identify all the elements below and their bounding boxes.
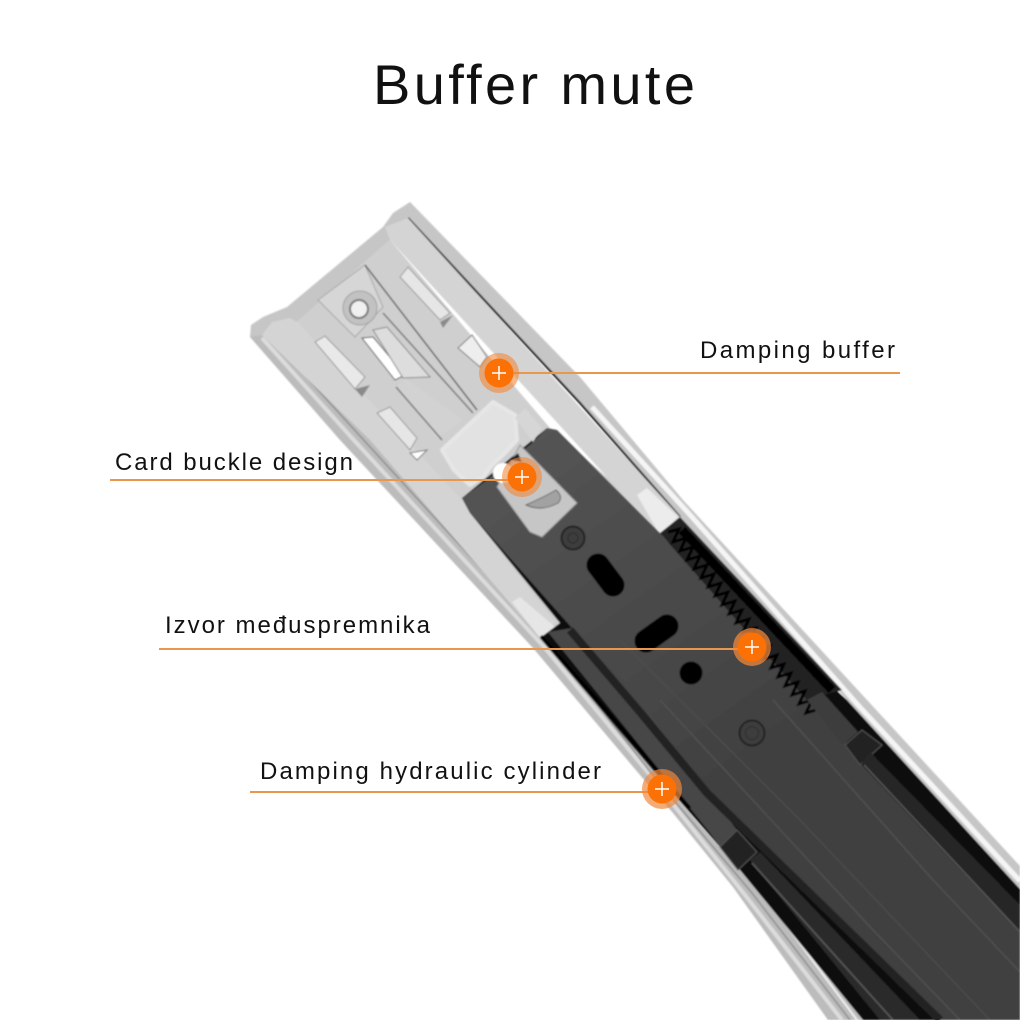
left silver strip: [250, 322, 863, 1020]
left channel lines: [541, 636, 690, 808]
right lip end piece: [637, 488, 678, 535]
callout: card buckle design: Card buckle design: [115, 449, 353, 476]
light tab: [442, 402, 517, 485]
black channel underlay: [462, 428, 1020, 1020]
right channel rail: [862, 752, 1020, 933]
slot holes and rivets: [562, 526, 764, 746]
dark plate: [462, 428, 1020, 1020]
right silver strip: [408, 202, 1020, 889]
drawer slide rail photo: [250, 202, 1020, 1020]
left lip: [262, 318, 555, 638]
lower left clip: [720, 830, 757, 870]
damper block: [807, 692, 858, 745]
callout: buffer spring: Izvor međuspremnika: [165, 612, 431, 639]
callout: damping hydraulic cylinder: Damping hydraulic cylinder: [260, 758, 601, 785]
plate between the lips: [297, 240, 680, 640]
spring channel: [660, 517, 842, 700]
mounting bracket: [318, 265, 383, 337]
title: Buffer mute: [373, 53, 695, 116]
callout: damping buffer: Damping buffer: [700, 337, 895, 364]
left lip end piece: [512, 597, 555, 638]
left dark block: [548, 628, 737, 847]
spring: [668, 529, 819, 713]
slots in plate: [315, 265, 487, 460]
lower left rail: [750, 852, 920, 1020]
callout: card buckle design: [110, 449, 542, 497]
callout: damping hydraulic cylinder: [250, 758, 682, 809]
right lip: [385, 218, 680, 535]
small upper tab: [515, 408, 542, 442]
callout: damping buffer: [479, 337, 900, 393]
end cap bar: [250, 202, 414, 337]
silver bracket with slot: [493, 445, 577, 537]
callout: buffer spring: [159, 612, 771, 666]
right clip: [845, 730, 882, 765]
plate ribs: [570, 630, 1020, 1020]
